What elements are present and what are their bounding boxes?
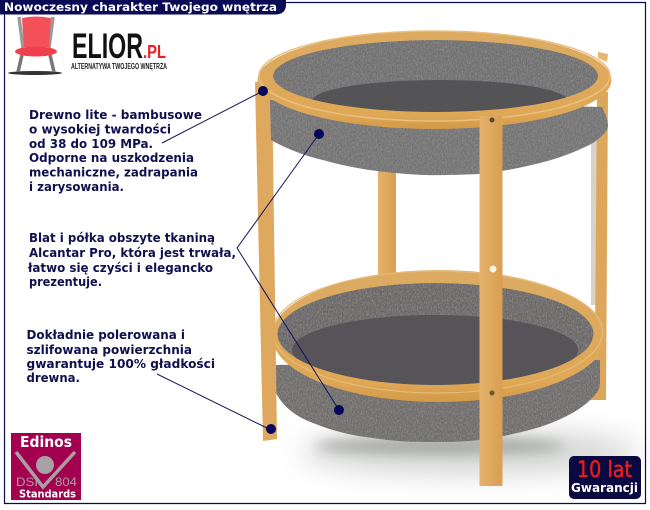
text block: polished surface: gwarantuje 100% gładkości xyxy=(26,357,215,371)
upper ring xyxy=(258,31,612,129)
text block: solid wood: Odporne na uszkodzenia xyxy=(29,151,194,165)
floor shadow xyxy=(300,430,640,474)
text block: fabric: Blat i półka obszyte tkaniną xyxy=(29,231,215,245)
product photo: bamboo table xyxy=(255,31,612,486)
right leg cap xyxy=(598,52,608,62)
badge: Edinos Standards: Standards xyxy=(19,488,76,500)
leg screws xyxy=(490,118,496,396)
text block: fabric: łatwo się czyści i elegancko xyxy=(27,261,213,275)
left leg xyxy=(255,82,277,441)
badge: Edinos Standards: DSI xyxy=(16,475,38,489)
text block: solid wood xyxy=(29,108,202,194)
text block: solid wood: mechaniczne, zadrapania xyxy=(29,166,198,180)
upper basket base xyxy=(312,80,566,112)
logo: Elior.pl: ALTERNATYWA TWOJEGO WNĘTRZA xyxy=(71,62,167,71)
back leg xyxy=(378,170,396,278)
text block: polished surface: drewna. xyxy=(26,371,80,385)
badge: 10 years warranty: 10 lat xyxy=(577,458,632,483)
badge: Edinos Standards xyxy=(11,433,81,500)
badge: 10 years warranty xyxy=(569,456,641,499)
badge: Edinos Standards: 804 xyxy=(55,475,77,489)
upper basket inside xyxy=(273,40,598,112)
text block: polished surface: Dokładnie polerowana i xyxy=(26,328,185,342)
text block: solid wood: Drewno lite - bambusowe xyxy=(29,108,202,122)
text block: solid wood: i zarysowania. xyxy=(29,180,124,194)
upper fabric front xyxy=(270,100,608,175)
text block: polished surface xyxy=(26,328,215,385)
callout lines and dots xyxy=(157,86,344,434)
logo: Elior.pl: .PL xyxy=(143,42,166,62)
front leg xyxy=(480,116,502,486)
lower basket inside xyxy=(278,283,594,385)
title bar: Nowoczesny charakter Twojego wnętrza xyxy=(4,0,277,14)
lower fabric front xyxy=(276,360,600,442)
shadowed right strip xyxy=(591,140,597,305)
text block: fabric: Alcantar Pro, która jest trwała, xyxy=(29,246,236,260)
text block: solid wood: o wysokiej twardości xyxy=(29,122,171,136)
badge: 10 years warranty: Gwarancji xyxy=(571,481,638,495)
icon: red chair xyxy=(8,16,62,75)
right leg xyxy=(590,92,608,400)
text block: solid wood: od 38 do 109 MPa. xyxy=(29,137,153,151)
text block: fabric xyxy=(27,231,236,289)
text block: polished surface: szlifowana powierzchnia xyxy=(26,343,192,357)
lower basket base xyxy=(292,315,578,385)
lower ring xyxy=(272,270,606,402)
logo: Elior.pl: ELIOR xyxy=(72,27,143,66)
text block: fabric: prezentuje. xyxy=(29,275,102,289)
badge: Edinos Standards: Edinos xyxy=(20,433,72,451)
